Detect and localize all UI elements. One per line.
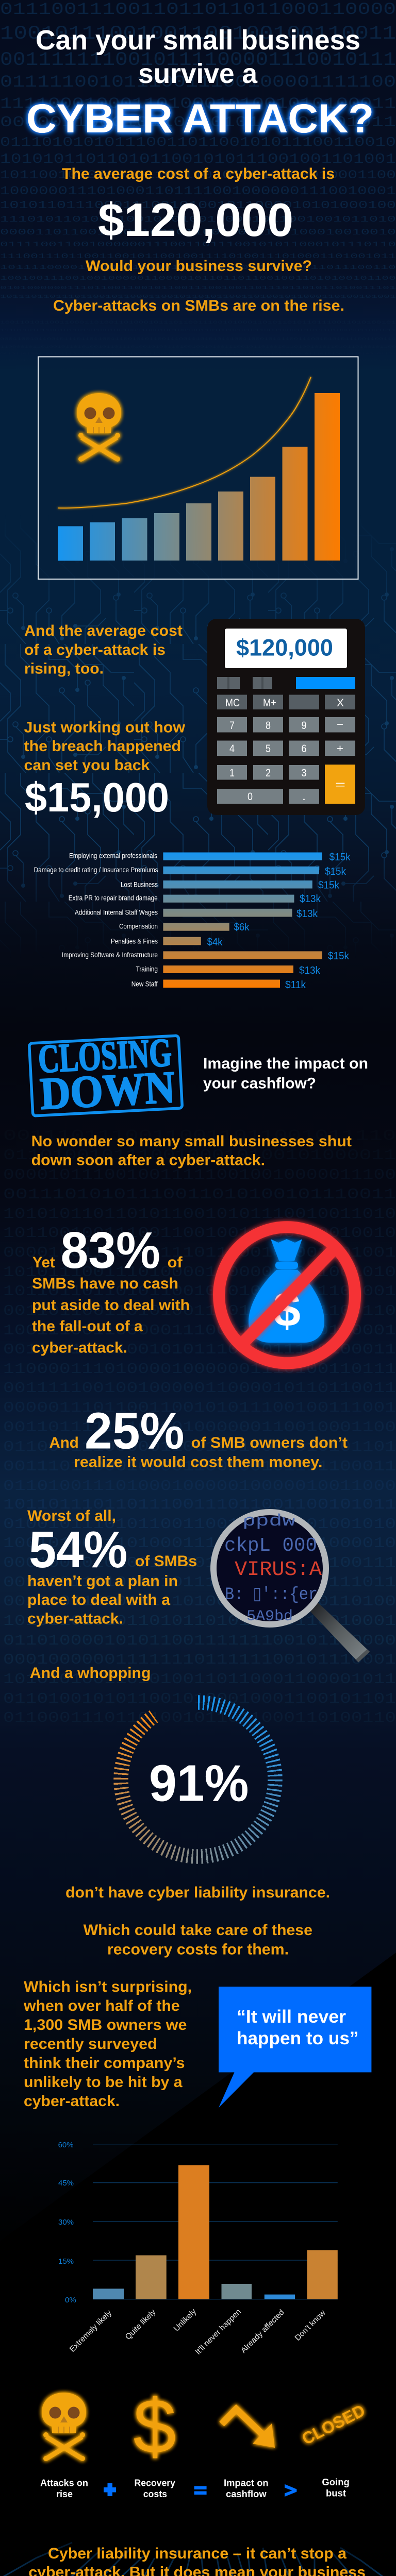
label: going bust: bust (326, 2488, 346, 2499)
text: no wonder: down soon after a cyber-attack. (31, 1152, 265, 1169)
label: going bust (322, 2477, 350, 2499)
background pattern: circuit traces middle (0, 515, 396, 958)
text: cost rising: And the average cost (24, 622, 183, 639)
stat: 83%: 83% (61, 1222, 160, 1279)
background pattern: binary rows top: 00000110001011010010100101001011 (0, 114, 396, 131)
text: a whopping: And a whopping (30, 1665, 151, 1682)
icon: calculator: 5 (266, 743, 271, 755)
label: impact on cashflow (224, 2478, 269, 2499)
stat: 83%: Yet (32, 1254, 55, 1271)
text: survey (23, 1978, 192, 2110)
icon: calculator: . (302, 791, 306, 803)
background pattern: binary rows top: 10010111001001100100100110011 (0, 23, 396, 45)
icon: closing down stamp: DOWN (39, 1062, 176, 1120)
text: breach cost (24, 719, 186, 820)
background pattern: binary rows middle: 00001011100100111110010010000011100 (3, 1166, 396, 1183)
chart x axis: Unlikely (172, 2307, 198, 2333)
background pattern: binary rows top: 111011010110010110110100100100110001001001001101001010101100010001010111010001011001011 (0, 329, 396, 333)
background pattern: binary rows middle: 10110111011011100111011001100101011 (3, 1496, 396, 1513)
background pattern: binary rows top: 01110101010111001101100101011100110010 (0, 134, 396, 150)
icon: calculator: = (335, 779, 345, 791)
chart labels: Extra PR to repair brand damage (69, 893, 158, 902)
chart values: $15k (329, 852, 351, 863)
magnifier handle (310, 1602, 370, 1662)
plus sign (104, 2483, 116, 2496)
text: conclusion (28, 2545, 366, 2576)
icon: closing down stamp: CLOSING (37, 1029, 173, 1081)
icon: no money bag: $ (273, 1282, 301, 1337)
icon: closed: CLOSED (299, 2401, 368, 2448)
chart y axis: 30% (58, 2218, 74, 2227)
chart x axis (68, 2307, 327, 2357)
title (26, 25, 374, 141)
chart values: $13k (299, 965, 321, 976)
text: recovery costs: recovery costs for them. (107, 1941, 289, 1958)
background pattern: binary rows top: 01010000001110110011001011001110010011011101101011010011101 (0, 285, 396, 291)
background pattern: binary rows top: 1011001011101001010110010110010111001011010100101110100101011010010111010110100101110101001011001011010010 (0, 359, 396, 362)
title: Can your small business (36, 25, 360, 56)
background pattern: binary rows middle: 10011100110000011100111010010100001 (3, 1322, 396, 1339)
chart columns (93, 2165, 338, 2299)
chart x axis: Quite likely (124, 2308, 158, 2342)
text: no wonder (31, 1133, 352, 1169)
stat: 54% (27, 1507, 197, 1627)
stat: 25%: 25% (85, 1402, 185, 1460)
background pattern: binary rows middle: 01101000010101100111111100101110000 (3, 1632, 396, 1649)
icon: no money bag (219, 1227, 355, 1363)
icon: calculator: 2 (266, 767, 271, 779)
chart values: $13k (296, 908, 318, 920)
callout: speech bubble: happen to us” (237, 2028, 359, 2048)
chart gridlines (93, 2144, 338, 2299)
background pattern: binary rows middle: 01101001110100010000010000010011000 (3, 1478, 396, 1495)
magnifier code text (224, 1512, 322, 1625)
intro: average cost: The average cost of a cyber-attack is (62, 165, 335, 182)
background pattern: binary rows middle (3, 1127, 396, 1726)
background pattern: binary rows top: 111100010001101000101001010100011 (0, 95, 396, 113)
background pattern: binary rows middle: 00101011000101110100010110110110100 (3, 1593, 396, 1610)
background pattern: binary rows top: 1100001011010010110101001011011101001010011010010010100111001011010010110100101011010110100101100 (0, 345, 396, 349)
chart: survey bars (58, 2141, 338, 2357)
chart x axis: Extremely likely (68, 2309, 113, 2354)
background pattern: binary rows middle: 10101110011101000011000001011001010 (3, 1264, 396, 1281)
background pattern: binary rows top: 1011101101110110010110001100101101011001101001011000110100101001 (0, 294, 396, 299)
background pattern: binary rows middle: 10101011011010110010101110010011010 (3, 1206, 396, 1223)
chart values: $15k (325, 866, 346, 877)
intro: average cost: Cyber-attacks on SMBs are on the rise. (53, 297, 344, 314)
background pattern: binary rows middle: 00000111011001100101011100100111001 (3, 1399, 396, 1416)
text: survey: 1,300 SMB owners we (24, 2016, 187, 2033)
chart values: $15k (318, 880, 340, 891)
calculator display: $120,000 (236, 635, 333, 660)
chart labels: Lost Business (121, 880, 158, 888)
text: imagine the impact: your cashflow? (203, 1075, 316, 1092)
stat: 54%: Worst of all, (27, 1507, 116, 1524)
stat: 25%: of SMB owners don’t (191, 1434, 348, 1451)
chart labels: Training (136, 965, 158, 973)
text: survey: think their company’s (24, 2055, 185, 2072)
text: survey: unlikely to be hit by a (24, 2074, 183, 2091)
chart x axis: It'll never happen (194, 2308, 243, 2357)
background pattern: binary rows middle: 01100011101101001011011000110100110 (3, 1709, 396, 1726)
text: no cyber insurance: don’t have cyber liability insurance. (65, 1884, 330, 1901)
text: survey: Which isn’t surprising, (24, 1978, 192, 1995)
background pattern: binary rows middle: 00010000001111111011111100101110001 (3, 1651, 396, 1668)
background pattern: binary rows middle: 10110010011100110010010000000010010 (3, 1225, 396, 1242)
icon: calculator: MC (225, 697, 240, 709)
text: cost rising: of a cyber-attack is (24, 641, 166, 658)
equation: icons and labels (40, 2383, 368, 2499)
background pattern: binary rows middle: 00111011000100001100100101111100011 (3, 1458, 396, 1475)
chart labels: Improving Software & Infrastructure (62, 951, 158, 959)
chart labels: Additional Internal Staff Wages (75, 908, 158, 916)
text: no wonder: No wonder so many small businesses shut (31, 1133, 352, 1150)
stat: 83%: SMBs have no cash (32, 1275, 178, 1292)
background pattern: binary rows middle: 01100011100000110011010000010101101 (3, 1438, 396, 1455)
calculator display (225, 629, 347, 668)
stat: 25% (50, 1402, 348, 1470)
text: survey: when over half of the (23, 1997, 180, 2014)
callout: speech bubble: “It will never (237, 2007, 346, 2027)
background pattern: binary rows top: 01111100101110011100100001111100 (0, 73, 396, 92)
stat: 83%: of (168, 1254, 183, 1271)
text: breach cost: the breach happened (24, 738, 181, 755)
background pattern: circuit perspective bottom (0, 2543, 396, 2576)
magnifier code text: ckpL 000 (224, 1535, 317, 1557)
stat: 25%: And (50, 1434, 79, 1451)
icon: calculator: 1 (229, 767, 235, 779)
stat: 54%: cyber-attack. (27, 1611, 123, 1627)
chart y axis: 0% (65, 2296, 76, 2304)
icon: closing down stamp (29, 1029, 183, 1120)
stat: 54%: 54% (29, 1521, 127, 1579)
stat: $15,000: $15,000 (25, 774, 169, 820)
chart labels: Employing external professionals (69, 852, 157, 860)
label: attacks on rise (40, 2478, 88, 2499)
chart labels: Compensation (119, 922, 158, 930)
stat: 83%: the fall-out of a (32, 1318, 143, 1335)
background pattern: binary rows middle: 11000011101000010000001110100110111 (3, 1361, 396, 1378)
icon: calculator: 3 (301, 767, 306, 779)
background pattern: binary rows middle: 00110110011010100110011010101100110 (3, 1302, 396, 1319)
background pattern: binary rows top: 101011011100011100101001011000010101000100 (0, 200, 396, 212)
background pattern: binary rows middle: 10010100111010001110101000101000010 (3, 1535, 396, 1552)
intro: average cost (53, 165, 344, 314)
background pattern: binary rows top: 1001001110010010000011000010110110110010011010100101100 (0, 276, 396, 282)
chart: rising bars (58, 393, 340, 561)
label: attacks on rise: Attacks on (40, 2478, 88, 2488)
stat: 54%: place to deal with a (27, 1591, 170, 1608)
background pattern: binary rows top: 0111001110011011011011000110000 (0, 0, 396, 19)
label: impact on cashflow: cashflow (226, 2489, 267, 2499)
chart values: $11k (285, 979, 306, 991)
background pattern: binary rows middle: 00001001110100111011100101001001001 (3, 1244, 396, 1261)
chart x axis: Don't know (293, 2308, 327, 2343)
intro: average cost: Would your business survive? (86, 258, 312, 275)
chart y axis: 45% (58, 2179, 74, 2188)
text: conclusion: Cyber liability insurance – it can’t stop a (48, 2545, 346, 2562)
text: cost rising (24, 622, 183, 677)
chart values: $15k (328, 951, 350, 962)
label: recovery costs: Recovery (134, 2478, 175, 2488)
stat: 83%: put aside to deal with (32, 1297, 190, 1314)
icon: calculator: 0 (248, 791, 253, 803)
label: recovery costs: costs (143, 2489, 167, 2499)
icon: calculator: M+ (263, 697, 276, 709)
background pattern: binary rows middle: 00111110010010000011000010110110011 (3, 1380, 396, 1397)
prohibition sign (219, 1227, 355, 1363)
chart labels: Damage to credit rating / Insurance Premiums (34, 866, 158, 874)
background pattern: binary rows top (0, 0, 396, 362)
background pattern: binary rows top: 0111100110010000001110011011100101011000101110110 (0, 241, 396, 249)
title: cyber attack glow: CYBER ATTACK? (26, 95, 374, 141)
text: imagine the impact (203, 1055, 368, 1092)
stat: 83% (32, 1222, 190, 1356)
label: attacks on rise: rise (56, 2489, 73, 2499)
background pattern: binary rows middle: 10101010011010100110110001100001011 (3, 1671, 396, 1688)
background pattern: binary rows top: 1110011101100110010110010011110100111010001101001011 (0, 252, 396, 261)
background pattern: binary rows middle: 10101101010110101101010010110010001 (3, 1613, 396, 1630)
text: survey: cyber-attack. (24, 2093, 120, 2110)
stat: 91%: 91% (149, 1754, 249, 1812)
magnifier code text: B: ▯'::{er (225, 1585, 318, 1605)
title: survive a (138, 59, 258, 89)
icon: calculator: + (337, 743, 343, 755)
chart x axis: Already affected (239, 2308, 286, 2355)
icon: falling arrow (222, 2409, 275, 2448)
icon: skull (42, 2393, 86, 2461)
icon: calculator: 8 (266, 720, 271, 732)
background pattern: binary rows middle: 00110110011001010111001011110100011 (3, 1341, 396, 1358)
icon: calculator: 6 (301, 743, 306, 755)
stat: 54%: haven’t got a plan in (27, 1573, 178, 1590)
label: going bust: Going (322, 2477, 350, 2487)
background pattern: binary rows top: 101111000011010011010011001011101011110011011100110 (0, 265, 396, 271)
chart values (207, 852, 351, 991)
background pattern: binary rows middle: 00110011010100101110001011100111011 (3, 1574, 396, 1591)
background pattern: binary rows top: 10011010110011000110100110100010111011001110010100011010110101101110011010100101 (0, 320, 396, 325)
money bag (249, 1239, 324, 1343)
icon: dollar: $ (133, 2383, 176, 2469)
background pattern: binary rows top: 0011111110010111100001110010111 (0, 49, 396, 71)
icon: skull (77, 393, 121, 462)
chart y axis: 15% (58, 2257, 74, 2266)
background pattern: binary rows top: 000110010110010111011011001110010101100111001110101011100110001011110011100101010111001100111 (0, 337, 396, 342)
label: recovery costs (134, 2478, 175, 2499)
background pattern: binary rows middle: 00010010101001001010101110111100111 (3, 1554, 396, 1571)
chart: breach cost bars (34, 852, 351, 991)
magnifier code text: VIRUS:A (235, 1558, 322, 1582)
chart y axis (58, 2141, 76, 2304)
stat: 54%: of SMBs (135, 1553, 197, 1570)
magnifier code text: ppdw (242, 1512, 295, 1531)
stat: 25%: realize it would cost them money. (74, 1454, 322, 1470)
panel: rising attacks chart (38, 357, 358, 579)
stat: 83%: cyber-attack. (32, 1340, 127, 1356)
text: breach cost: can set you back (24, 757, 150, 774)
background: black diagonal (0, 1953, 396, 2576)
icon: calculator: X (337, 697, 344, 709)
text: cost rising: rising, too. (24, 660, 104, 677)
background pattern: binary rows top: 000011011001100110010110010011100100010010010 (0, 228, 396, 238)
chart values: $6k (234, 922, 250, 933)
chart labels: Penalties & Fines (111, 937, 158, 945)
label: impact on cashflow: Impact on (224, 2478, 269, 2488)
icon: calculator: 9 (301, 720, 306, 732)
background pattern: binary rows top: 10110010001001011001101010010000010001100 (0, 168, 396, 182)
background pattern: binary rows middle: 00111010101110011010100101110011 (3, 1186, 396, 1203)
callout: speech bubble (219, 1987, 371, 2108)
background pattern: binary rows top: 1010101101101011001010111001001101001 (0, 152, 396, 167)
background pattern: binary rows middle: 01001011101011001100101011101001010 (3, 1516, 396, 1533)
greater than sign (285, 2484, 296, 2497)
chart bars (163, 852, 322, 988)
text: breach cost: Just working out how (24, 719, 186, 736)
background pattern: binary rows middle: 01101001011100100010100101000011 (3, 1147, 396, 1164)
background pattern: binary rows middle: 00110111110100001000000110010001100 (3, 1419, 396, 1436)
chart: trend curve (58, 377, 311, 508)
background pattern: binary rows top: 11101011010011001010100100001011001001011010 (0, 215, 396, 225)
chart y axis: 60% (58, 2141, 74, 2149)
magnifier code text: 5A9bd (246, 1608, 293, 1625)
icon: calculator: − (337, 719, 343, 731)
text: imagine the impact: Imagine the impact on (203, 1055, 368, 1072)
chart: 91% tick ring (113, 1695, 283, 1864)
background pattern: binary rows top: 10000001110100011011110010000001110010001 (0, 184, 396, 198)
icon: calculator: 4 (229, 743, 235, 755)
chart labels: New Staff (131, 980, 158, 988)
background pattern: binary rows top: 00101101001100101110101110100101001001011010100111010100101101001010010101101001011101010010110100101101 (0, 352, 396, 355)
text: survey: recently surveyed (24, 2036, 157, 2053)
chart labels (34, 852, 158, 988)
background pattern: binary rows middle: 01101001010110010100010001100101101 (3, 1690, 396, 1707)
equals sign (194, 2486, 207, 2495)
background pattern: binary rows middle: 10110110110101100100010001011100001 (3, 1283, 396, 1300)
text: recovery costs (84, 1922, 312, 1958)
text: recovery costs: Which could take care of these (84, 1922, 312, 1939)
icon: calculator (207, 619, 365, 815)
icon: magnifying glass (213, 1512, 370, 1662)
chart values: $4k (207, 937, 223, 948)
chart values: $13k (300, 893, 321, 905)
background pattern: binary rows middle: 00111011100110011011001011110 (3, 1127, 396, 1144)
icon: calculator: 7 (229, 720, 235, 732)
stat: $120,000: $120,000 (98, 194, 293, 246)
